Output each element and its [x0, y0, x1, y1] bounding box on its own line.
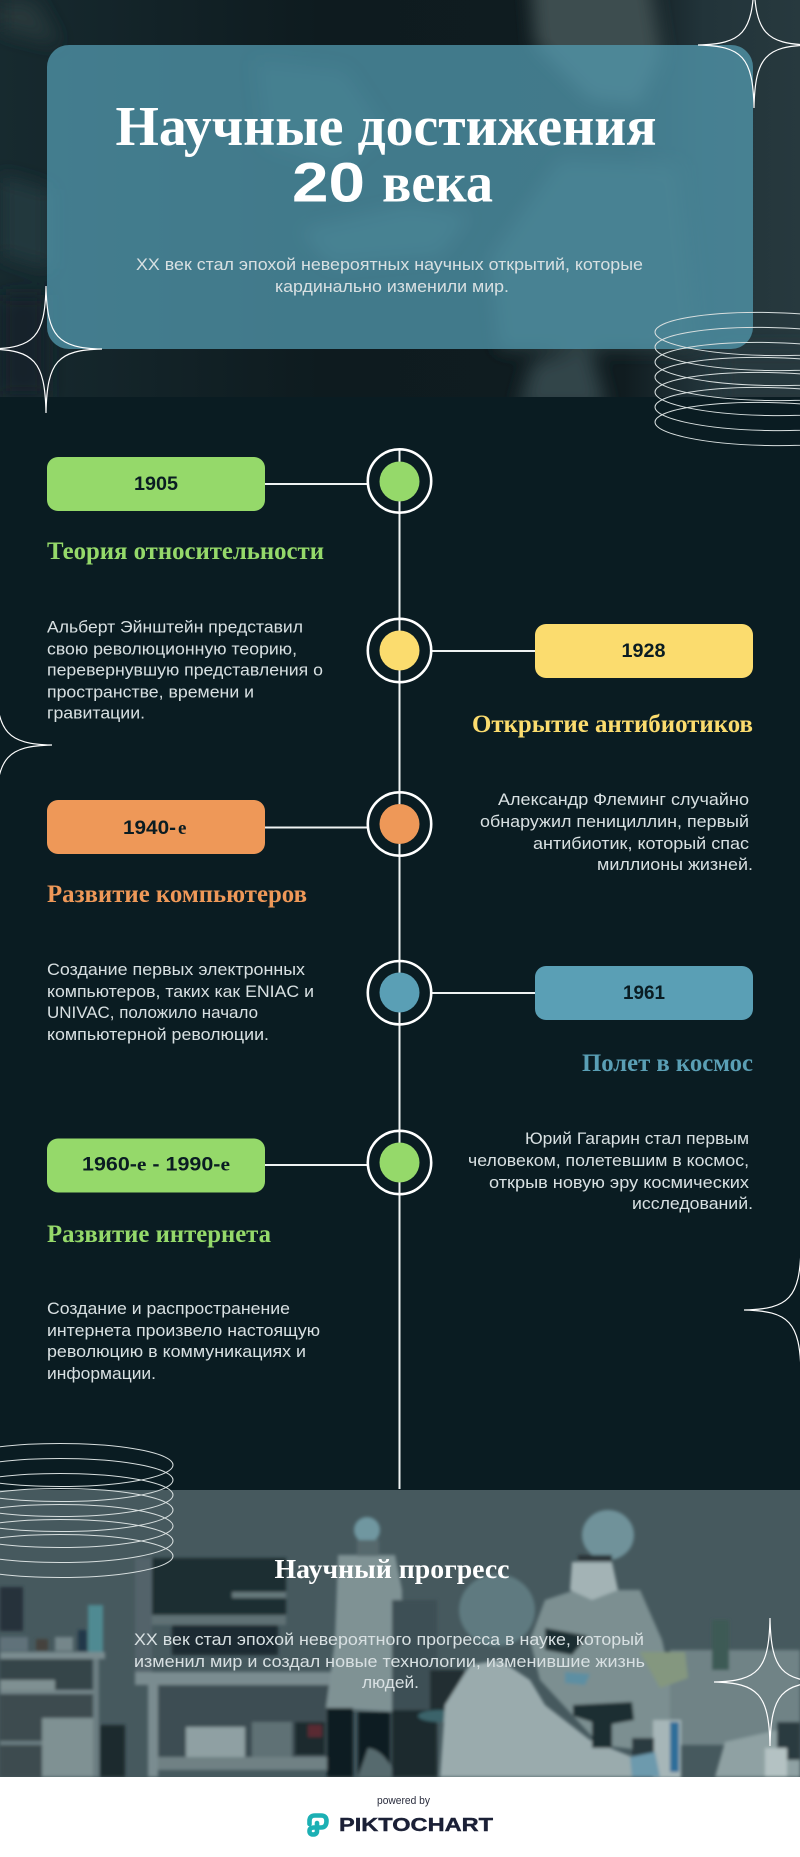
footer photo — [0, 1490, 800, 1778]
main title: века — [382, 152, 493, 214]
description: Александр Флеминг случайно — [498, 791, 749, 809]
description: обнаружил пенициллин, первый — [480, 813, 749, 831]
description: Создание первых электронных — [47, 961, 306, 979]
event 1960s-1990s — [47, 1131, 431, 1383]
event 1928 — [368, 619, 753, 874]
description: революцию в коммуникациях и — [47, 1343, 306, 1361]
decorative spiral top right — [655, 311, 800, 447]
description: компьютерной революции. — [47, 1026, 269, 1044]
timeline node — [368, 961, 431, 1024]
description: гравитации. — [47, 704, 145, 722]
powered by label: powered by — [377, 1795, 430, 1807]
description: компьютеров, таких как ENIAC и — [47, 983, 314, 1001]
header subtitle — [136, 256, 643, 296]
footer description: людей. — [362, 1674, 419, 1692]
header photo — [0, 0, 800, 410]
description: Создание и распространение — [47, 1300, 290, 1318]
description — [47, 618, 323, 722]
decorative star header left — [0, 286, 102, 413]
event 1905 — [47, 449, 431, 722]
main title: Научные достижения — [116, 96, 656, 158]
footer description — [134, 1631, 645, 1692]
year pill 1928: 1928 — [622, 641, 666, 662]
decorative star footer right — [714, 1618, 800, 1746]
description: Юрий Гагарин стал первым — [525, 1130, 749, 1148]
timeline node — [368, 1131, 431, 1194]
header subtitle: XX век стал эпохой невероятных научных открытий, которые — [136, 256, 643, 274]
year pill 1928 — [535, 624, 753, 678]
description: антибиотик, который спас — [533, 835, 749, 853]
logo icon — [310, 1816, 326, 1834]
white branding strip — [0, 1777, 800, 1857]
year pill 1940s — [47, 800, 265, 854]
footer description: изменил мир и создал новые технологии, изменившие жизнь — [134, 1653, 645, 1671]
logo wordmark: PIKTOCHART — [339, 1815, 493, 1835]
heading: Полет в космос — [582, 1050, 753, 1077]
year pill 1940s: е — [178, 818, 186, 839]
year pill 1960s-1990s — [47, 1138, 265, 1192]
timeline node — [368, 792, 431, 856]
description: перевернувшую представления о — [47, 662, 323, 680]
footer description: XX век стал эпохой невероятного прогресса в науке, который — [134, 1631, 644, 1649]
description: открыв новую эру космических — [489, 1174, 750, 1192]
decorative star left edge — [0, 682, 52, 808]
heading: Открытие антибиотиков — [472, 711, 753, 738]
description: миллионы жизней. — [597, 856, 753, 874]
footer text block — [134, 1554, 645, 1692]
decorative star top right — [698, 0, 800, 108]
heading: Теория относительности — [47, 538, 324, 565]
description — [480, 791, 753, 874]
description — [47, 1300, 320, 1383]
year pill 1905 — [47, 457, 265, 511]
description: исследований. — [632, 1195, 753, 1213]
decorative spiral bottom left — [0, 1444, 173, 1578]
description: интернета произвело настоящую — [47, 1322, 320, 1340]
header subtitle: кардинально изменили мир. — [275, 278, 509, 296]
timeline node — [368, 449, 431, 513]
main title — [116, 96, 656, 214]
heading: Развитие компьютеров — [47, 881, 307, 908]
event 1961 — [368, 961, 753, 1213]
description — [47, 961, 314, 1044]
year pill 1905: 1905 — [134, 474, 178, 495]
description: пространстве, времени и — [47, 684, 254, 702]
year pill 1940s: 1940- — [123, 818, 176, 839]
event 1940s — [47, 792, 431, 1044]
description: UNIVAC, положило начало — [47, 1004, 258, 1022]
footer heading: Научный прогресс — [274, 1554, 510, 1584]
description — [468, 1130, 753, 1213]
timeline node — [368, 619, 431, 682]
description: Альберт Эйнштейн представил — [47, 618, 303, 636]
timeline axis — [398, 449, 400, 1489]
description: человеком, полетевшим в космос, — [468, 1152, 749, 1170]
header panel — [47, 45, 753, 349]
description: свою революционную теорию, — [47, 640, 297, 658]
piktochart logo — [310, 1815, 493, 1835]
year pill 1960s-1990s: 1960- е - 1990- е — [82, 1154, 230, 1176]
decorative star right edge — [744, 1247, 800, 1373]
heading: Развитие интернета — [47, 1221, 271, 1248]
year pill 1961: 1961 — [623, 983, 665, 1004]
description: информации. — [47, 1365, 156, 1383]
year pill 1961 — [535, 966, 753, 1020]
main title: 20 — [292, 150, 365, 214]
